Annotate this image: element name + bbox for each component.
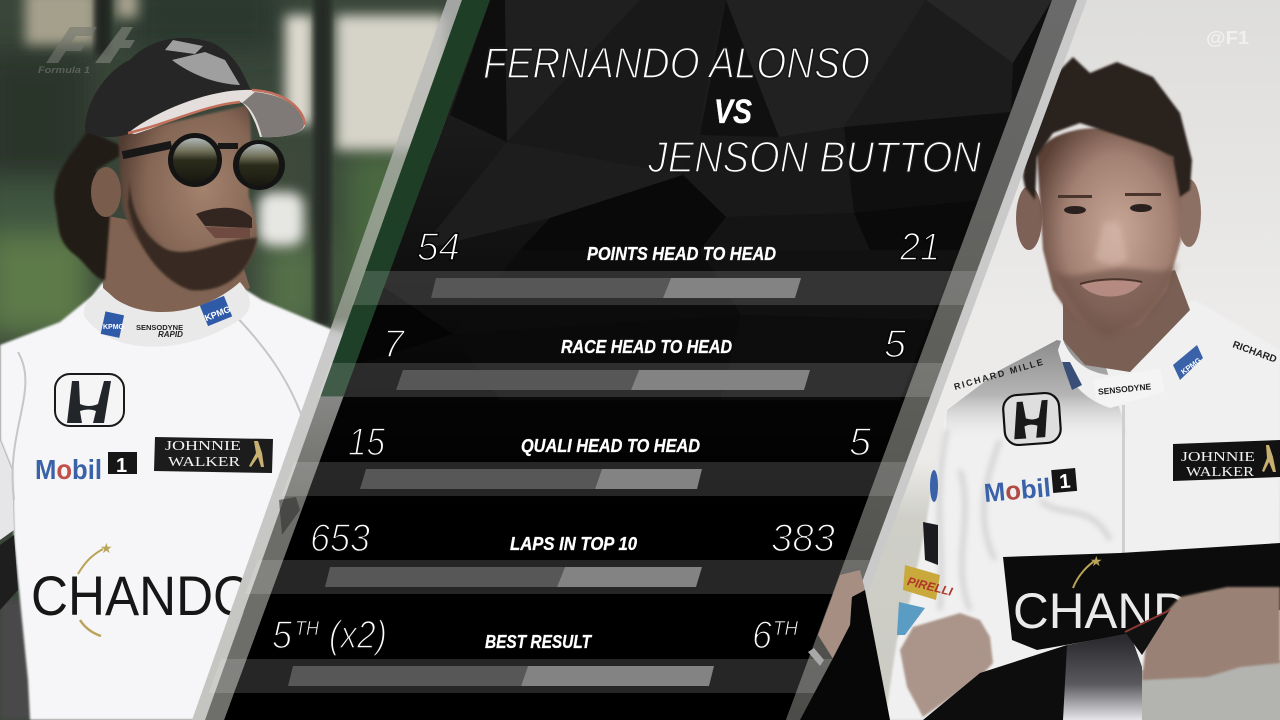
logo: Chandon: ★: [100, 542, 113, 557]
logo: Mobil 1: [35, 452, 137, 485]
suit: [885, 300, 1280, 720]
stat row: race head to head: 5: [884, 323, 906, 366]
logo: Mobil 1: 1: [1058, 471, 1071, 493]
logo: Johnnie Walker: JOHNNIE: [1181, 450, 1255, 465]
icon: Formula 1 logo: [38, 27, 135, 75]
stat row: race head to head: RACE HEAD TO HEAD: [561, 337, 732, 357]
logo: Chandon: [1013, 555, 1263, 639]
icon: Formula 1 logo: Formula 1: [38, 65, 90, 75]
hair: [54, 130, 130, 280]
band: light strip right: [811, 0, 1087, 720]
face: [1037, 128, 1181, 337]
jersey: [0, 283, 345, 720]
side patches: PIRELLI: [906, 574, 955, 599]
logo: Johnnie Walker: WALKER: [168, 455, 241, 470]
flag: [222, 680, 236, 704]
logo: Mobil 1: 1: [116, 455, 127, 477]
band: grey strip right: [786, 0, 1077, 720]
logo: Johnnie Walker: WALKER: [1186, 465, 1255, 480]
neck: [103, 215, 250, 315]
photo: Fernando Alonso: [0, 27, 345, 720]
logo: KPMG collar: KPMG: [103, 324, 125, 331]
stat row: laps in top 10: 383: [771, 517, 835, 560]
hands and gloves: [900, 587, 1280, 720]
low-poly facets: [340, 0, 1052, 400]
logo: KPMG collar: SENSODYNE: [136, 323, 183, 332]
stat row: race head to head: 7: [383, 323, 405, 366]
neck: [1063, 270, 1190, 372]
title: Jenson Button: JENSON BUTTON: [647, 133, 981, 182]
photo: Button background: [780, 0, 1280, 720]
stat row: points head to head: 54: [417, 226, 460, 269]
collar: [84, 282, 250, 347]
stat row: quali head to head: [348, 421, 871, 489]
logo: Mobil 1: Mobil: [35, 454, 102, 485]
logo: Sensodyne and KPMG: [953, 339, 1278, 407]
logo: Sensodyne and KPMG: KPMG: [1179, 356, 1203, 376]
photo: Jenson Button: [885, 57, 1280, 720]
stat row: best result: BEST RESULT: [485, 632, 593, 652]
stat row: quali head to head: 5: [849, 421, 871, 464]
sleeve detail over left strip: [279, 497, 300, 535]
stat row: points head to head: 21: [899, 226, 940, 269]
ear: [91, 167, 121, 217]
stat row: quali head to head: 15: [348, 421, 385, 464]
logo: Honda: [55, 374, 124, 426]
title: [483, 39, 981, 182]
cap: [85, 38, 252, 137]
stat row: laps in top 10: 653: [310, 517, 370, 560]
photo: Alonso background: [0, 0, 520, 720]
logo: KPMG collar: [101, 296, 232, 339]
stat row: best result: 6: [752, 614, 772, 657]
logo: Mobil 1: [982, 468, 1078, 508]
side patches: [897, 470, 955, 635]
overlap: Button arm over right strip: [800, 570, 890, 720]
row bands: [209, 271, 977, 693]
logo: Chandon: [31, 542, 253, 636]
band: outer light strip left: [192, 0, 462, 720]
stat row: points head to head: [417, 226, 940, 298]
logo: KPMG collar: KPMG: [203, 304, 232, 323]
band: green strip left: [205, 0, 490, 720]
logo: Mobil 1: Mobil: [983, 472, 1052, 508]
hair: [1023, 57, 1192, 200]
logo: Chandon: ★: [1090, 555, 1103, 570]
ears: [1016, 186, 1042, 250]
title: Fernando Alonso: FERNANDO ALONSO: [483, 39, 870, 88]
stat row: best result: TH: [295, 618, 319, 640]
nose: [1095, 222, 1128, 264]
title: VS: VS: [714, 93, 752, 131]
stat row: best result: TH: [773, 618, 799, 640]
logo: Honda: [1002, 392, 1062, 446]
stat row: best result: 5: [272, 614, 292, 657]
mouth: [1080, 279, 1142, 297]
logo: Sensodyne and KPMG: SENSODYNE: [1098, 381, 1152, 397]
eyes: [1058, 193, 1161, 214]
text: @F1 watermark: @F1: [1206, 28, 1249, 48]
panel: central black panel: [224, 0, 1052, 720]
stat row: best result: [272, 614, 799, 686]
logo: Johnnie Walker: [1173, 440, 1280, 481]
stat row: points head to head: POINTS HEAD TO HEAD: [587, 244, 776, 264]
beard: [128, 175, 257, 290]
black stripe: [1003, 543, 1280, 650]
logo: Chandon: CHANDON: [1013, 583, 1263, 639]
collar: [1058, 306, 1215, 408]
stat row: best result: (x2): [329, 614, 387, 657]
logo: KPMG collar: RAPID: [158, 330, 183, 339]
logo: Johnnie Walker: [154, 437, 273, 473]
stat row: race head to head: [383, 323, 906, 390]
logo: Sensodyne and KPMG: RICHARD: [1231, 339, 1278, 366]
stat row: laps in top 10: [310, 517, 835, 587]
cap brim: [128, 90, 305, 137]
stat row: quali head to head: QUALI HEAD TO HEAD: [521, 436, 700, 456]
logo: Chandon: CHANDO: [31, 564, 253, 627]
logo: Sensodyne and KPMG: RICHARD MILLE: [953, 357, 1044, 392]
face: [118, 105, 257, 289]
stat row: laps in top 10: LAPS IN TOP 10: [510, 534, 637, 554]
sunglasses: [122, 133, 285, 190]
logo: Johnnie Walker: JOHNNIE: [165, 439, 241, 454]
